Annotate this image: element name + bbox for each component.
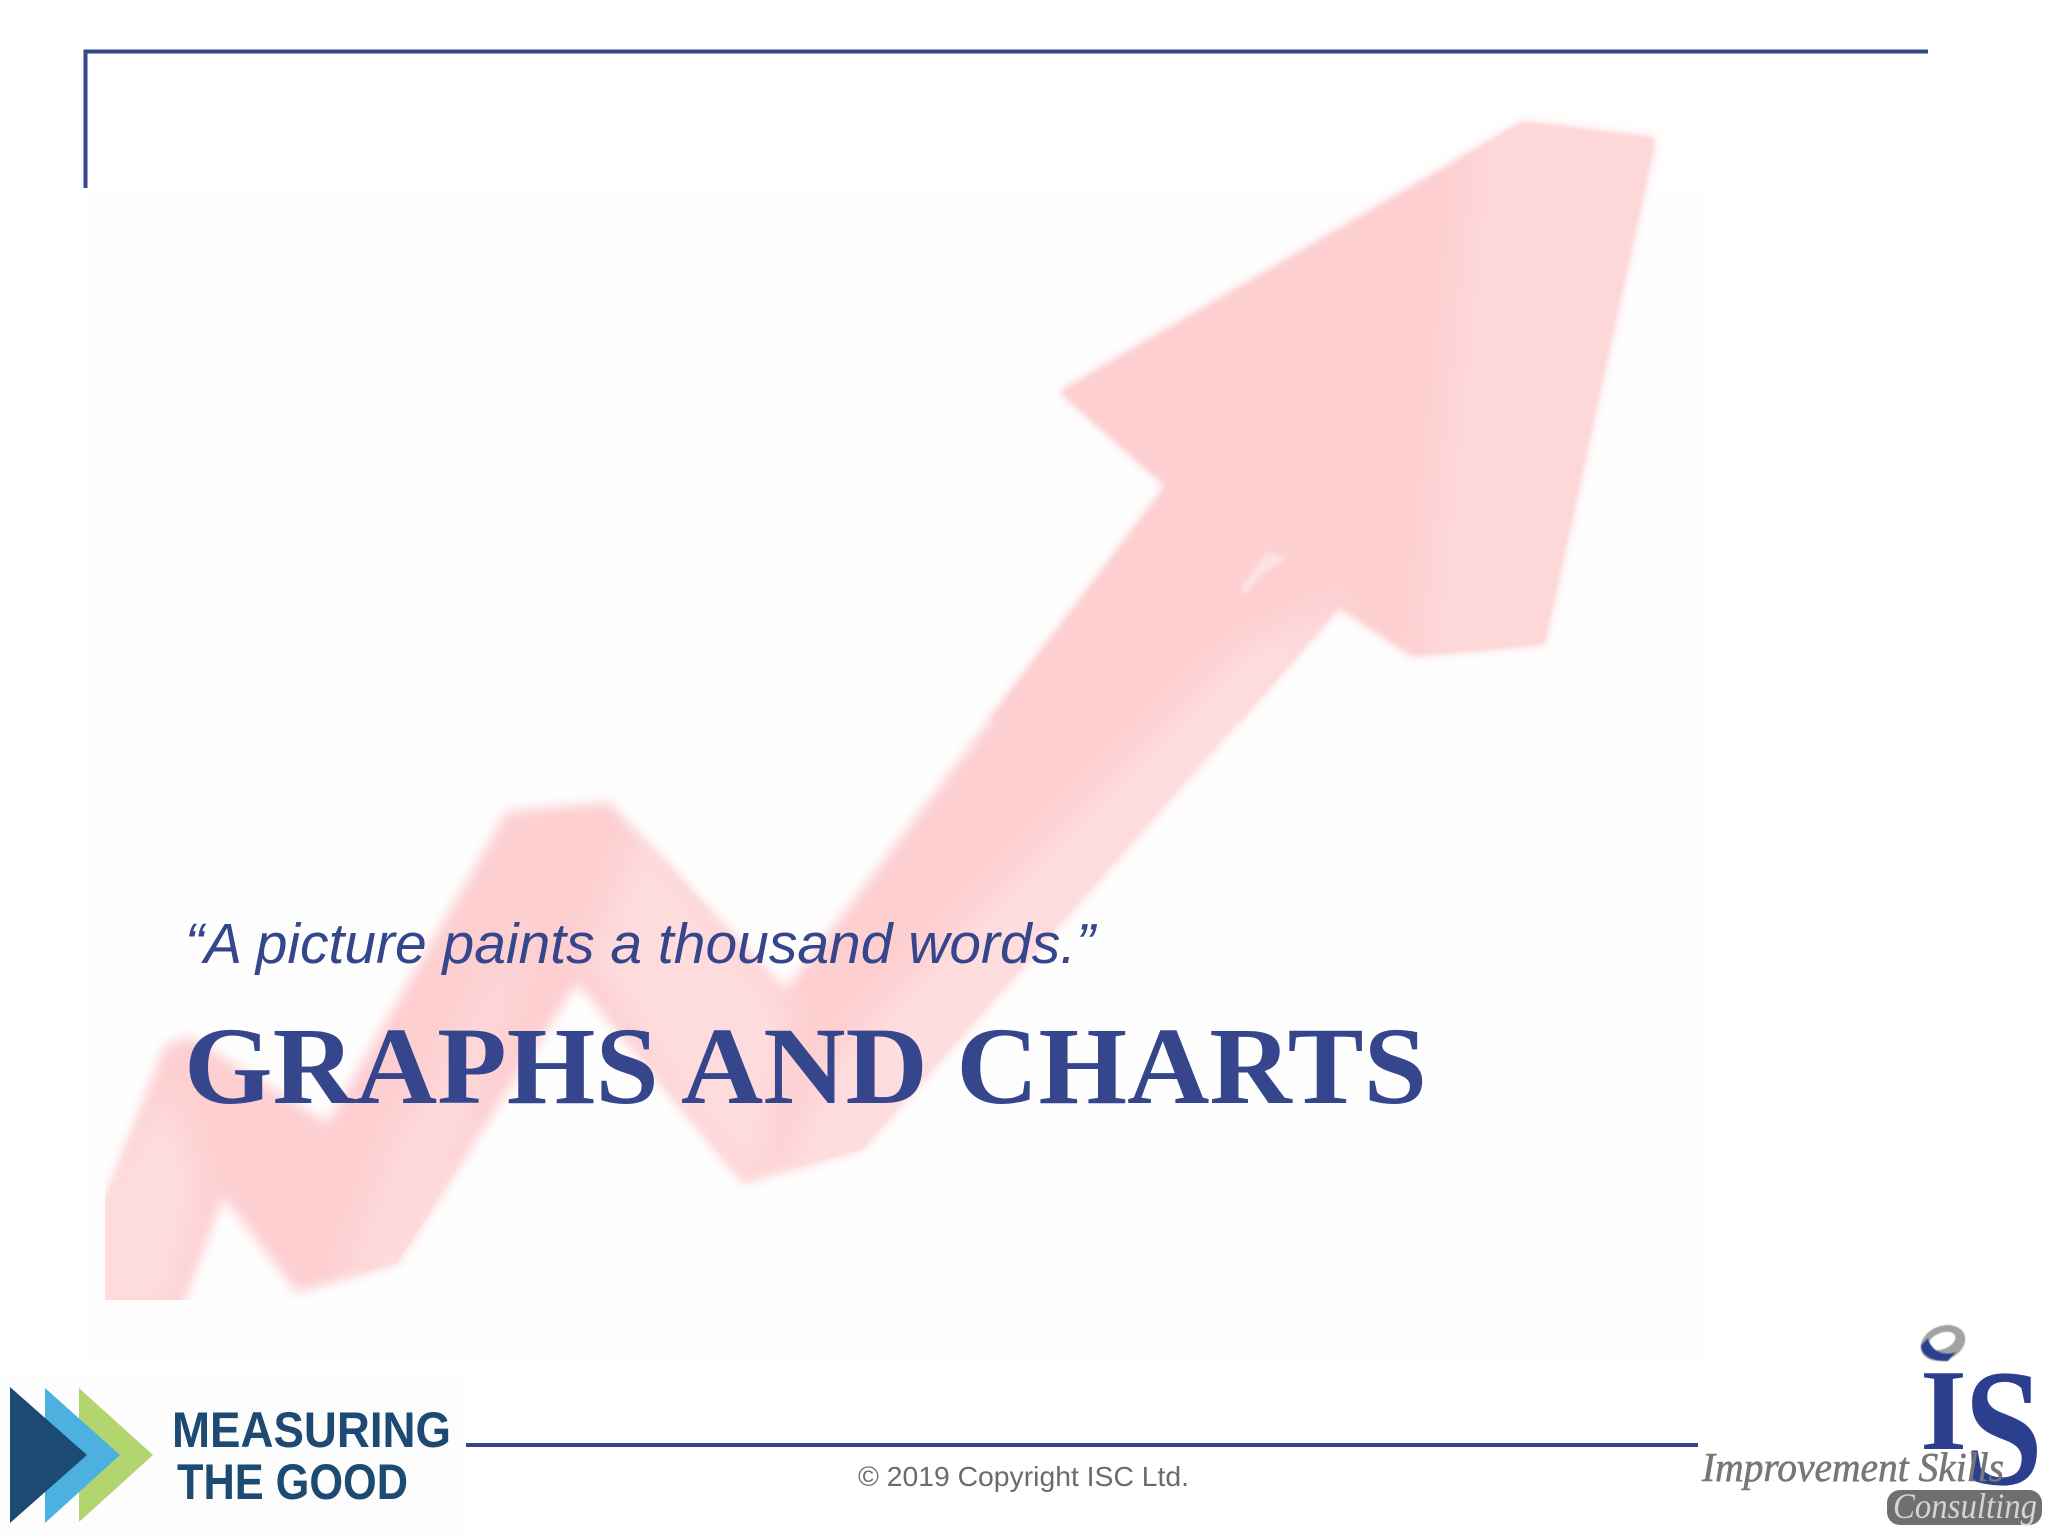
icon: blue triangle [45, 1388, 120, 1523]
logo letters: IS [1920, 1336, 2043, 1521]
icon: ring [1915, 1319, 1971, 1367]
title: GRAPHS AND CHARTS [184, 1005, 1427, 1127]
icon: green triangle [79, 1388, 153, 1522]
top frame line [86, 52, 1928, 188]
background arrow graphic [95, 110, 1680, 1320]
logo text: measuring: MEASURING [172, 1402, 451, 1458]
logo letters: IS: I [1920, 1347, 1967, 1475]
copyright: © 2019 Copyright ISC Ltd. [858, 1461, 1189, 1492]
logo text: improvement skills: Improvement Skills [1701, 1444, 2004, 1490]
logo: Improvement Skills Consulting [1701, 1319, 2043, 1526]
icon: navy triangle [10, 1387, 87, 1523]
consulting pill: Consulting [1893, 1486, 2037, 1526]
quote: “A picture paints a thousand words.” [185, 912, 1098, 976]
footer line [466, 1443, 1698, 1447]
logo text: the good: THE GOOD [177, 1454, 408, 1510]
logo: Measuring the Good [0, 1380, 464, 1536]
